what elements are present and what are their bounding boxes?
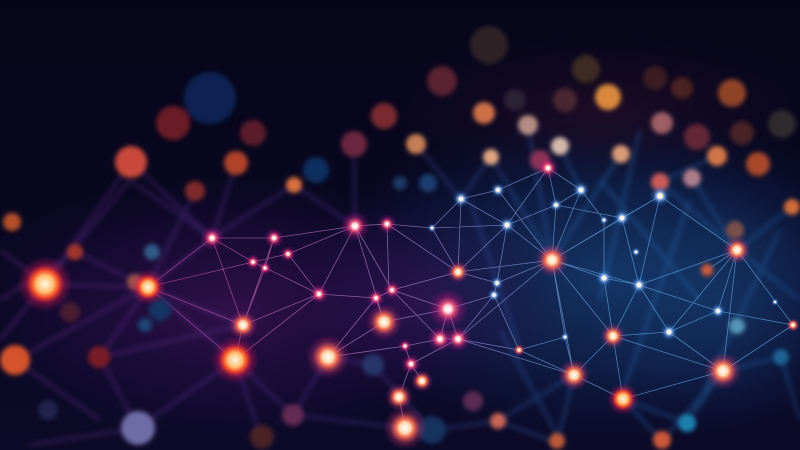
glowing network nodes: small blue-white xyxy=(427,181,779,342)
blurred background network lines xyxy=(0,125,800,445)
glowing network nodes: large warm xyxy=(17,256,800,450)
glowing network nodes: small pink xyxy=(200,157,751,374)
network edges xyxy=(148,168,793,428)
